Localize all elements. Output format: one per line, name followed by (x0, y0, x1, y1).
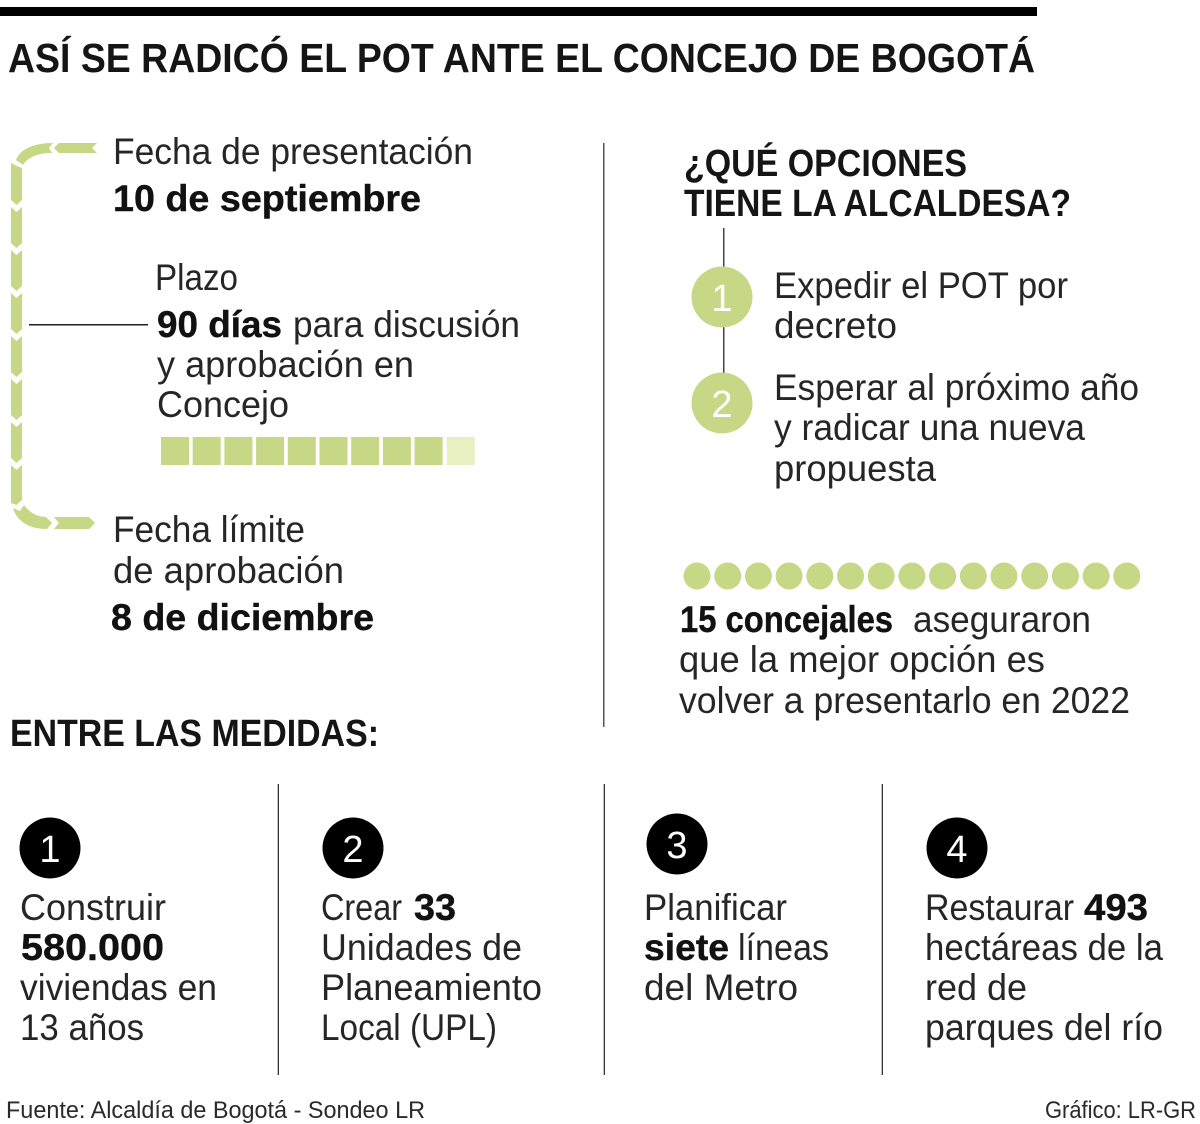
approval deadline date: 8 de diciembre (111, 597, 374, 638)
councillors text (679, 599, 1130, 721)
councillors text: 15 concejales (680, 599, 893, 640)
measure 2: 33 (414, 887, 456, 928)
deadline text: Plazo (155, 257, 238, 298)
presentation date: 10 de septiembre (113, 178, 421, 219)
measure 4: red de (925, 967, 1027, 1008)
progress squares (161, 437, 475, 465)
measure 2: Unidades de (321, 927, 522, 968)
measure 2: Local (UPL) (321, 1007, 497, 1048)
option 1 badge (692, 266, 752, 328)
options heading: ¿QUÉ OPCIONES (684, 141, 967, 185)
approval deadline date (111, 509, 374, 638)
options heading (684, 141, 1071, 225)
measure 1: viviendas en (20, 967, 217, 1008)
measure 2: Crear (321, 887, 402, 928)
measure 2: 2 (342, 829, 364, 871)
measure 3 (644, 814, 829, 1008)
source: Fuente: Alcaldía de Bogotá - Sondeo LR (6, 1097, 425, 1124)
center divider (603, 143, 604, 727)
title: ASÍ SE RADICÓ EL POT ANTE EL CONCEJO DE BOGOTÁ (8, 35, 1035, 81)
deadline text: Concejo (157, 384, 289, 425)
options heading: TIENE LA ALCALDESA? (684, 183, 1071, 225)
option 1 text: Expedir el POT por (774, 265, 1068, 306)
measure 4: Restaurar (925, 887, 1074, 928)
approval deadline date: de aprobación (113, 550, 344, 591)
measure 4: parques del río (925, 1007, 1163, 1048)
connector line to deadline (29, 324, 148, 326)
option 2 badge: 2 (711, 384, 733, 426)
deadline text: para discusión (293, 304, 520, 345)
measure 3: Planificar (644, 887, 787, 928)
deadline text: 90 días (157, 304, 282, 345)
option 2 text (774, 367, 1139, 489)
presentation date: Fecha de presentación (113, 131, 473, 172)
measure 1: 13 años (20, 1007, 144, 1048)
presentation date (113, 131, 473, 219)
measure 4: hectáreas de la (925, 927, 1163, 968)
timeline bracket (11, 143, 97, 529)
option 1 text: decreto (774, 305, 897, 346)
option 2 text: Esperar al próximo año (774, 367, 1139, 408)
option 1 text (774, 265, 1068, 346)
measure 4 (925, 818, 1163, 1048)
measure 4: 493 (1084, 887, 1148, 928)
measure dividers (278, 784, 883, 1075)
measure 1: 1 (39, 829, 61, 871)
measure 2: Planeamiento (321, 967, 542, 1008)
deadline text (155, 257, 520, 425)
measure 3: 3 (666, 825, 688, 867)
measure 1 (20, 818, 217, 1048)
measure 3: siete (644, 927, 729, 968)
options connector (723, 228, 724, 373)
measure 1: Construir (20, 887, 166, 928)
measure 4: 4 (946, 829, 968, 871)
measure 2 (321, 818, 542, 1048)
measure 3: del Metro (644, 967, 798, 1008)
approval deadline date: Fecha límite (113, 509, 305, 550)
measures heading: ENTRE LAS MEDIDAS: (10, 713, 379, 755)
councillor dots (684, 562, 1140, 590)
option 2 text: propuesta (774, 448, 936, 489)
measure 3: líneas (738, 927, 829, 968)
measure 1: 580.000 (21, 927, 164, 968)
top rule (0, 7, 1037, 16)
councillors text: volver a presentarlo en 2022 (679, 680, 1130, 721)
councillors text: que la mejor opción es (679, 639, 1045, 680)
deadline text: y aprobación en (157, 344, 414, 385)
option 2 badge (692, 372, 752, 434)
councillors text: aseguraron (913, 599, 1091, 640)
option 1 badge: 1 (711, 278, 733, 320)
option 2 text: y radicar una nueva (774, 407, 1085, 448)
